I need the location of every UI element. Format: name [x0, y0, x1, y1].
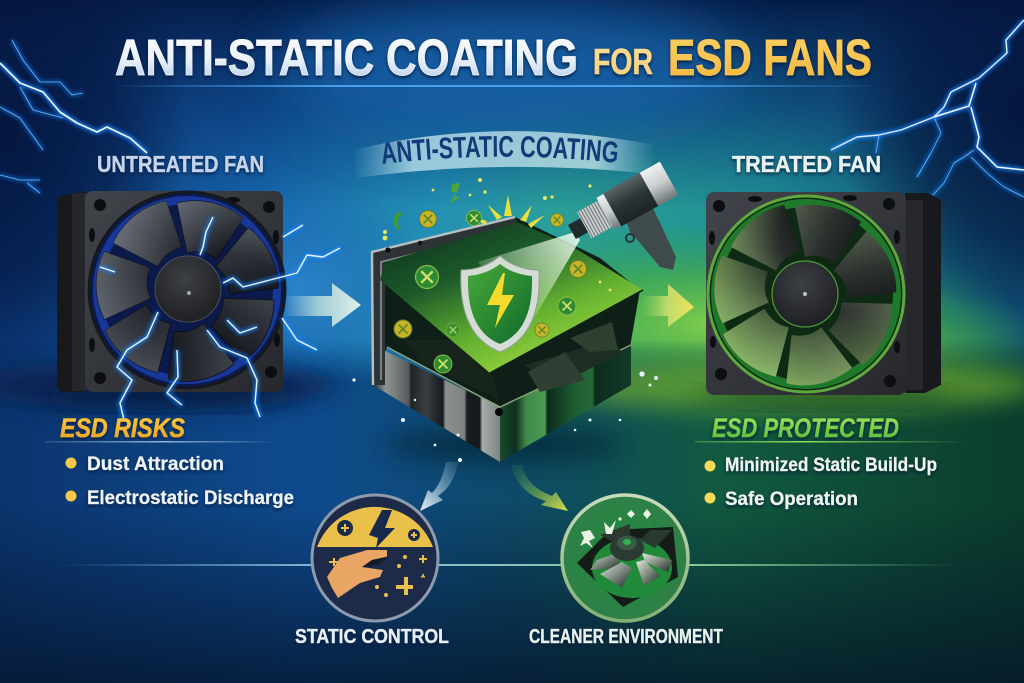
coating banner — [353, 131, 655, 178]
benefit: minimized static: Minimized Static Build-Up — [725, 455, 937, 476]
arrow: to static control — [420, 462, 458, 511]
back frame — [372, 217, 520, 385]
spray gun — [563, 162, 678, 270]
arrow: to coating — [284, 283, 361, 327]
banner label: ANTI-STATIC COATING — [382, 136, 618, 164]
protected heading: ESD PROTECTED — [712, 413, 899, 443]
coated panel — [380, 222, 643, 373]
title: ESD FANS — [668, 29, 872, 86]
lightning on fan — [100, 217, 340, 420]
shield — [461, 256, 539, 352]
lightning: top left — [0, 40, 147, 193]
fan box bottom — [372, 217, 640, 462]
coated fan illustration — [352, 178, 658, 463]
horizon glow line — [60, 564, 960, 566]
starburst — [470, 195, 545, 228]
arrow: to cleaner environment — [511, 465, 568, 511]
risk: electrostatic discharge: Electrostatic Discharge — [87, 488, 294, 509]
icon: static control — [312, 495, 438, 621]
screws — [394, 210, 586, 373]
label: static control: STATIC CONTROL — [295, 625, 449, 648]
heading: untreated fan: UNTREATED FAN — [97, 151, 264, 177]
arrow: to treated fan — [640, 284, 694, 327]
spray cone — [478, 232, 580, 325]
untreated fan — [40, 190, 340, 420]
title: ANTI-STATIC COATING — [115, 29, 578, 86]
icon: cleaner environment — [562, 495, 688, 621]
sparks — [352, 178, 658, 462]
treated fan — [695, 192, 955, 405]
label: cleaner environment: CLEANER ENVIRONMENT — [529, 625, 723, 648]
panel: ESD protected — [695, 413, 965, 510]
panel: ESD risks — [45, 413, 294, 509]
title rule — [110, 85, 880, 87]
risks heading: ESD RISKS — [60, 413, 185, 443]
heading: treated fan: TREATED FAN — [732, 151, 881, 177]
risk: dust attraction: Dust Attraction — [87, 454, 224, 475]
lightning: top right — [831, 20, 1024, 197]
benefit: safe operation: Safe Operation — [725, 489, 858, 510]
title: FOR — [593, 41, 653, 82]
